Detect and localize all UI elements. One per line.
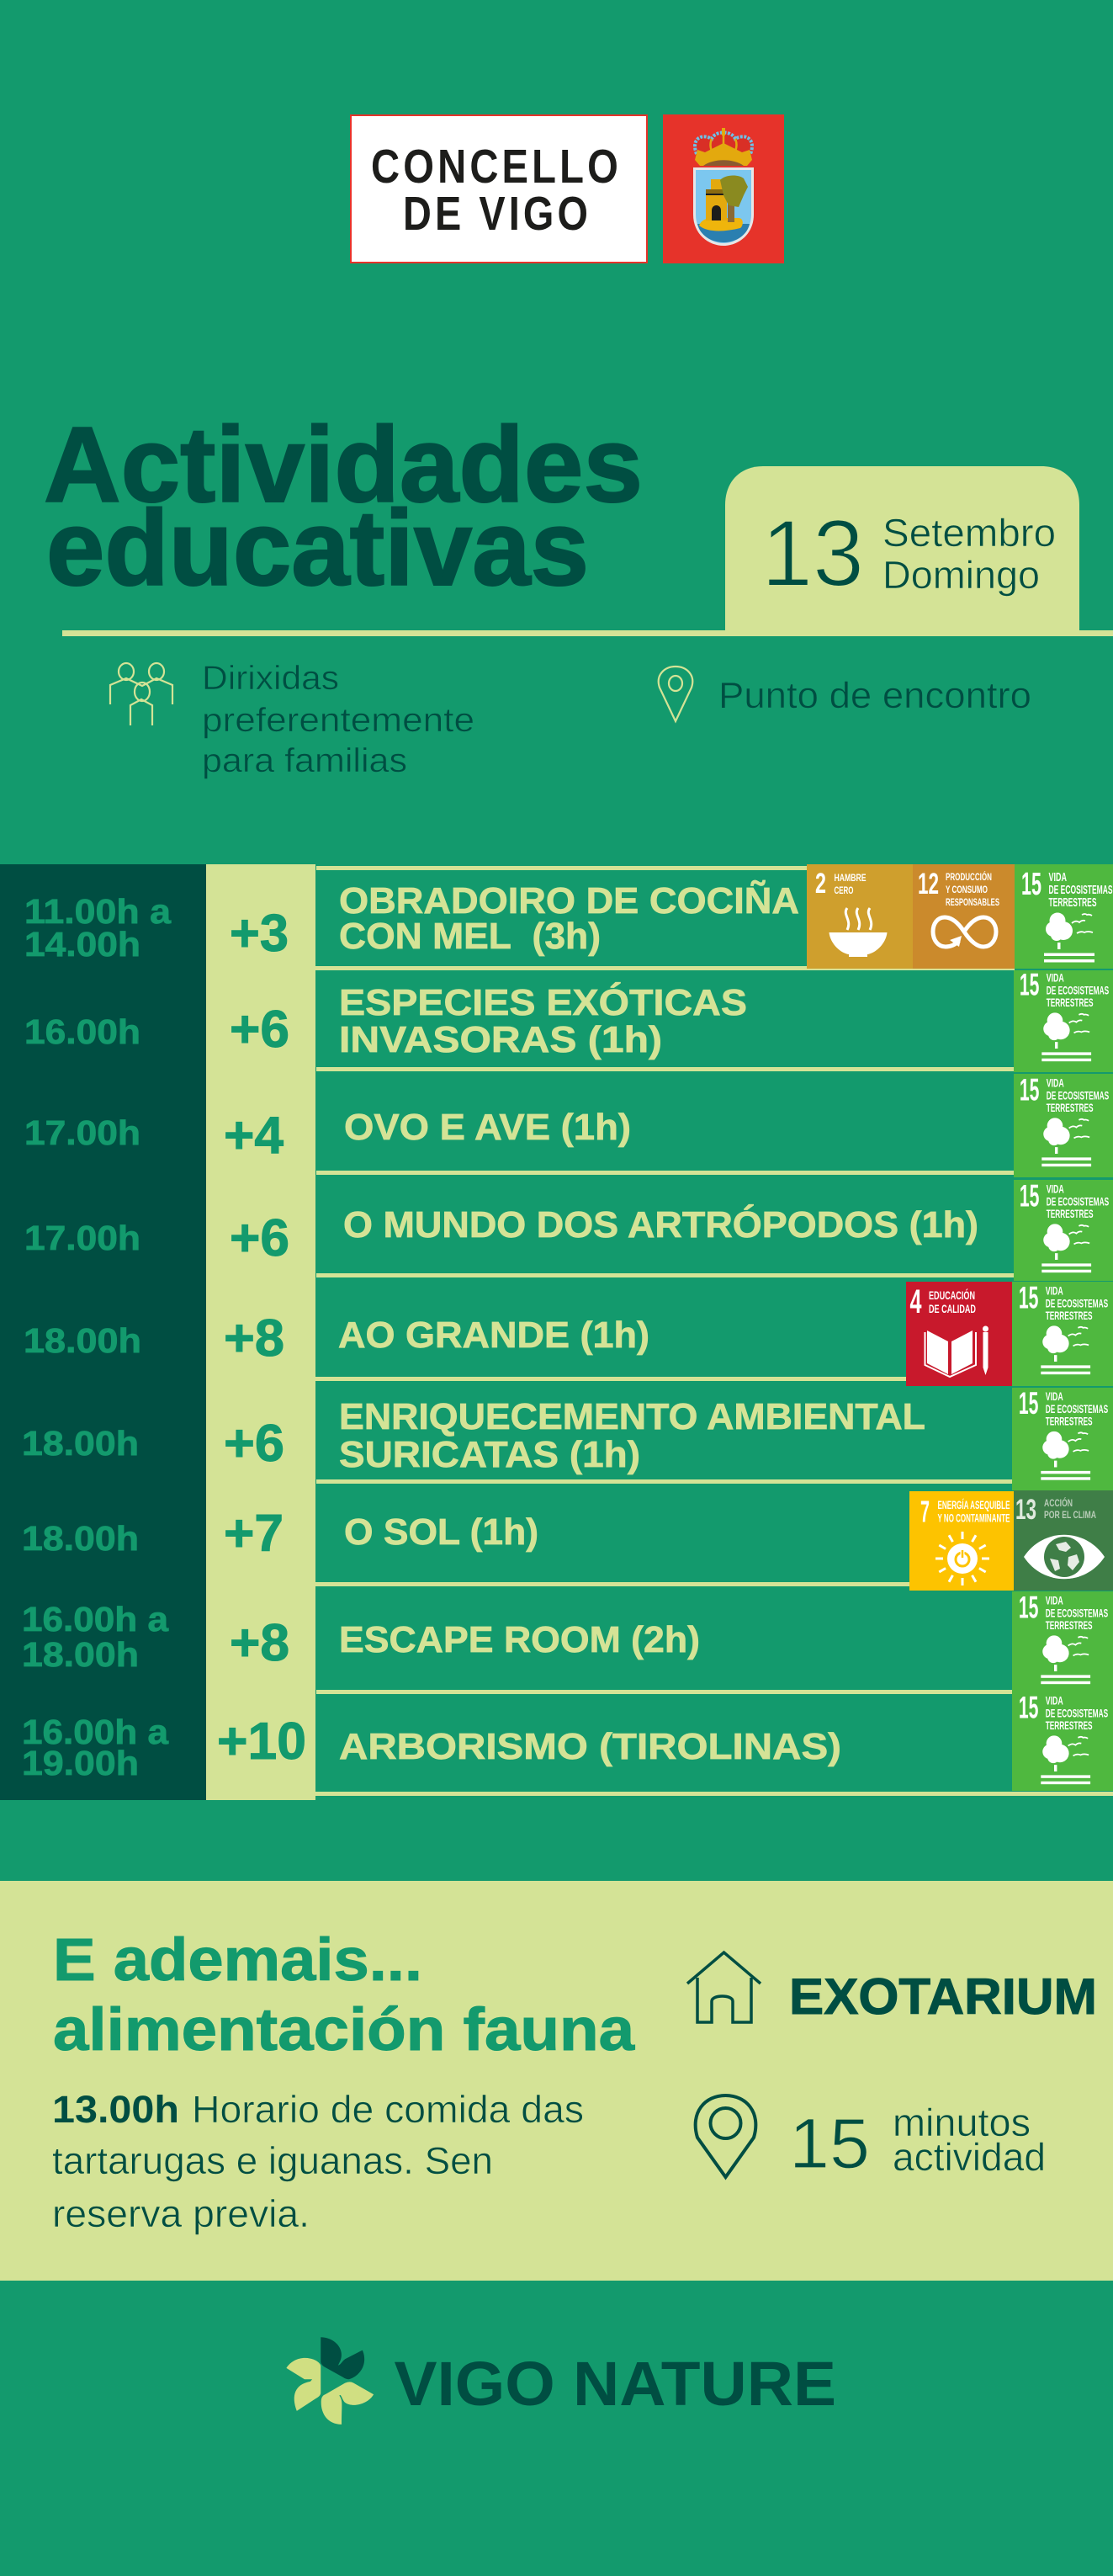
row: Enriquecemento ambiental suricatas: ENRIQUECEMENTO AMBIENTAL [339, 1396, 925, 1437]
icon: SDG 15 [1012, 1279, 1113, 1386]
icon: shield [693, 167, 754, 246]
icon: SDG 12: RESPONSABLES [946, 896, 999, 908]
panel: schedule participants column [206, 864, 315, 1800]
description: Horario de comida das [192, 2088, 584, 2131]
icon: SDG 12: 12 [918, 868, 939, 900]
description: tartarugas e iguanas. Sen [52, 2139, 493, 2182]
icon: SDG 7: Y NO CONTAMINANTE [937, 1511, 1010, 1525]
icon: leaves [286, 2337, 374, 2425]
audience text [202, 660, 474, 779]
icon: SDG 15: VIDA [1046, 1695, 1063, 1708]
icon: SDG 4: DE CALIDAD [929, 1302, 976, 1315]
row: Ao grande: +8 [224, 1309, 284, 1368]
row: Obradoiro de cociña: OBRADOIRO DE COCIÑA [339, 879, 799, 922]
audience text: Dirixidas [202, 660, 339, 697]
row: Ao grande: AO GRANDE (1h) [338, 1315, 649, 1356]
row: Arborismo: 19.00h [22, 1744, 139, 1782]
row: Ao grande [24, 1309, 649, 1368]
icon: SDG 7: 7 [920, 1495, 930, 1528]
icon: SDG 15: 15 [1019, 1279, 1038, 1315]
icon: SDG 15: VIDA [1046, 1595, 1063, 1608]
logo panel: name [351, 115, 647, 263]
row: O mundo dos artrópodos: +6 [230, 1209, 289, 1267]
row: O sol: +7 [224, 1505, 284, 1563]
icon: SDG 15 [1012, 1385, 1113, 1490]
row: Ao grande: 18.00h [24, 1321, 141, 1360]
icon: SDG 2 [807, 864, 913, 969]
icon: SDG 15 [1015, 864, 1113, 969]
date tab [725, 466, 1079, 631]
row: Escape room: 18.00h [22, 1635, 139, 1674]
icon: SDG 15: 15 [1020, 1177, 1039, 1213]
row: O mundo dos artrópodos: O MUNDO DOS ARTRÓPODOS (1h) [343, 1203, 978, 1246]
logo: Concello de Vigo [351, 114, 784, 263]
wordmark: VIGO NATURE [394, 2349, 836, 2419]
duration number: 15 [789, 2104, 870, 2183]
description: reserva previa. [52, 2192, 310, 2235]
meeting point text: Punto de encontro [718, 675, 1031, 716]
row: Ovo e ave [24, 1107, 631, 1165]
row: Especies exóticas invasoras: INVASORAS (1h) [339, 1019, 662, 1060]
title: educativas [46, 488, 589, 608]
row: Especies exóticas invasoras: +6 [230, 1001, 289, 1059]
row: Enriquecemento ambiental suricatas: +6 [224, 1415, 284, 1473]
row: Escape room [22, 1600, 700, 1674]
icon: SDG 15: 15 [1020, 1071, 1039, 1107]
icon: SDG 15 [1014, 966, 1113, 1072]
duration label [893, 2101, 1046, 2179]
audience text: para familias [202, 742, 407, 779]
row: Especies exóticas invasoras: ESPECIES EXÓTICAS [339, 981, 747, 1023]
row: O sol: O SOL (1h) [344, 1511, 538, 1553]
icon: SDG 13 [1014, 1490, 1113, 1591]
month and weekday: Setembro [882, 511, 1056, 555]
row: Obradoiro de cociña [24, 879, 799, 964]
logo panel: name: DE VIGO [403, 187, 591, 241]
icon: SDG 15: VIDA [1047, 1183, 1064, 1197]
row: Obradoiro de cociña: CON MEL (3h) [339, 916, 601, 957]
icon: house [687, 1952, 761, 2022]
month and weekday: Domingo [882, 553, 1040, 597]
icon: SDG 15: VIDA [1048, 871, 1067, 884]
panel: additional activity [0, 1881, 1113, 2281]
icon: SDG 13: 13 [1015, 1494, 1036, 1526]
row: Ovo e ave: 17.00h [24, 1113, 140, 1152]
icon: SDG 15 [1012, 1589, 1113, 1689]
row: Arborismo: 16.00h a [22, 1713, 169, 1751]
row: Arborismo: +10 [217, 1713, 306, 1771]
heading [53, 1927, 635, 2063]
day number: 13 [761, 501, 864, 606]
date rule [62, 630, 1113, 636]
row: Enriquecemento ambiental suricatas [22, 1396, 925, 1475]
icon: SDG 15: 15 [1021, 867, 1041, 902]
icon: map pin [659, 667, 692, 721]
row: Enriquecemento ambiental suricatas: 18.00h [22, 1424, 139, 1463]
icon: SDG 15: VIDA [1047, 972, 1064, 985]
icon: SDG 2: 2 [815, 868, 826, 900]
row: O mundo dos artrópodos: 17.00h [24, 1219, 140, 1257]
row dividers [315, 866, 1113, 1796]
row: O mundo dos artrópodos [24, 1203, 978, 1267]
icon: SDG 4: 4 [910, 1283, 922, 1320]
icon: SDG 15: VIDA [1046, 1285, 1063, 1299]
row: Escape room: +8 [230, 1614, 289, 1672]
icon: SDG 15: VIDA [1046, 1390, 1063, 1404]
icon: SDG 13: ACCIÓN [1044, 1496, 1073, 1509]
row: Ovo e ave: +4 [224, 1107, 284, 1165]
month and weekday [882, 511, 1056, 597]
icon: SDG 15 [1014, 1177, 1113, 1281]
audience text: preferentemente [202, 702, 474, 739]
icon: SDG 12 [913, 864, 1015, 969]
row: O sol [22, 1505, 538, 1563]
row: Escape room: ESCAPE ROOM (2h) [339, 1619, 700, 1660]
duration label: minutos [893, 2101, 1031, 2144]
panel: schedule time column [0, 864, 206, 1800]
icon: SDG 7: ENERGÍA ASEQUIBLE [937, 1498, 1010, 1511]
row: Escape room: 16.00h a [22, 1600, 169, 1639]
heading: alimentación fauna [53, 1997, 635, 2063]
icon: SDG 15: 15 [1019, 1689, 1038, 1724]
row: Obradoiro de cociña: +3 [230, 905, 289, 963]
description: 13.00h [52, 2088, 179, 2131]
icon: SDG 15: VIDA [1047, 1077, 1064, 1091]
icon: SDG 4: EDUCACIÓN [929, 1288, 975, 1302]
row: Obradoiro de cociña: 14.00h [24, 925, 140, 964]
row: Arborismo [22, 1713, 841, 1782]
icon: family [110, 663, 172, 725]
heading: E ademais... [53, 1927, 422, 1994]
logo: Vigo Nature [286, 2337, 836, 2425]
row: Enriquecemento ambiental suricatas: SURICATAS (1h) [339, 1434, 640, 1475]
icon: SDG 7 [909, 1491, 1014, 1591]
row: Especies exóticas invasoras [24, 981, 747, 1060]
icon: SDG 2: HAMBRE [835, 872, 867, 884]
location name: EXOTARIUM [789, 1968, 1097, 2025]
icon: SDG 12: Y CONSUMO [946, 884, 988, 895]
icon: SDG 15: 15 [1019, 1589, 1038, 1624]
icon: crown [695, 128, 752, 166]
description [52, 2088, 584, 2235]
icon: SDG 2: CERO [835, 884, 853, 896]
duration label: actividad [893, 2135, 1046, 2179]
icon: SDG 15: 15 [1019, 1385, 1038, 1421]
icon: SDG 12: PRODUCCIÓN [946, 870, 992, 883]
icon: SDG 15: 15 [1020, 966, 1039, 1001]
logo panel: name: CONCELLO [371, 140, 622, 194]
row: Ovo e ave: OVO E AVE (1h) [344, 1107, 631, 1148]
row: Especies exóticas invasoras: 16.00h [24, 1012, 140, 1051]
row: Arborismo: ARBORISMO (TIROLINAS) [339, 1726, 841, 1767]
icon: location pin [696, 2095, 755, 2177]
icon: SDG 15 [1014, 1071, 1113, 1177]
icon: SDG 4 [906, 1282, 1012, 1386]
icon: SDG 15 [1012, 1689, 1113, 1791]
title: Actividades [44, 405, 643, 524]
title [44, 405, 643, 608]
row: Obradoiro de cociña: 11.00h a [24, 892, 172, 931]
row: O sol: 18.00h [22, 1519, 139, 1558]
logo panel: coat of arms [663, 114, 784, 263]
